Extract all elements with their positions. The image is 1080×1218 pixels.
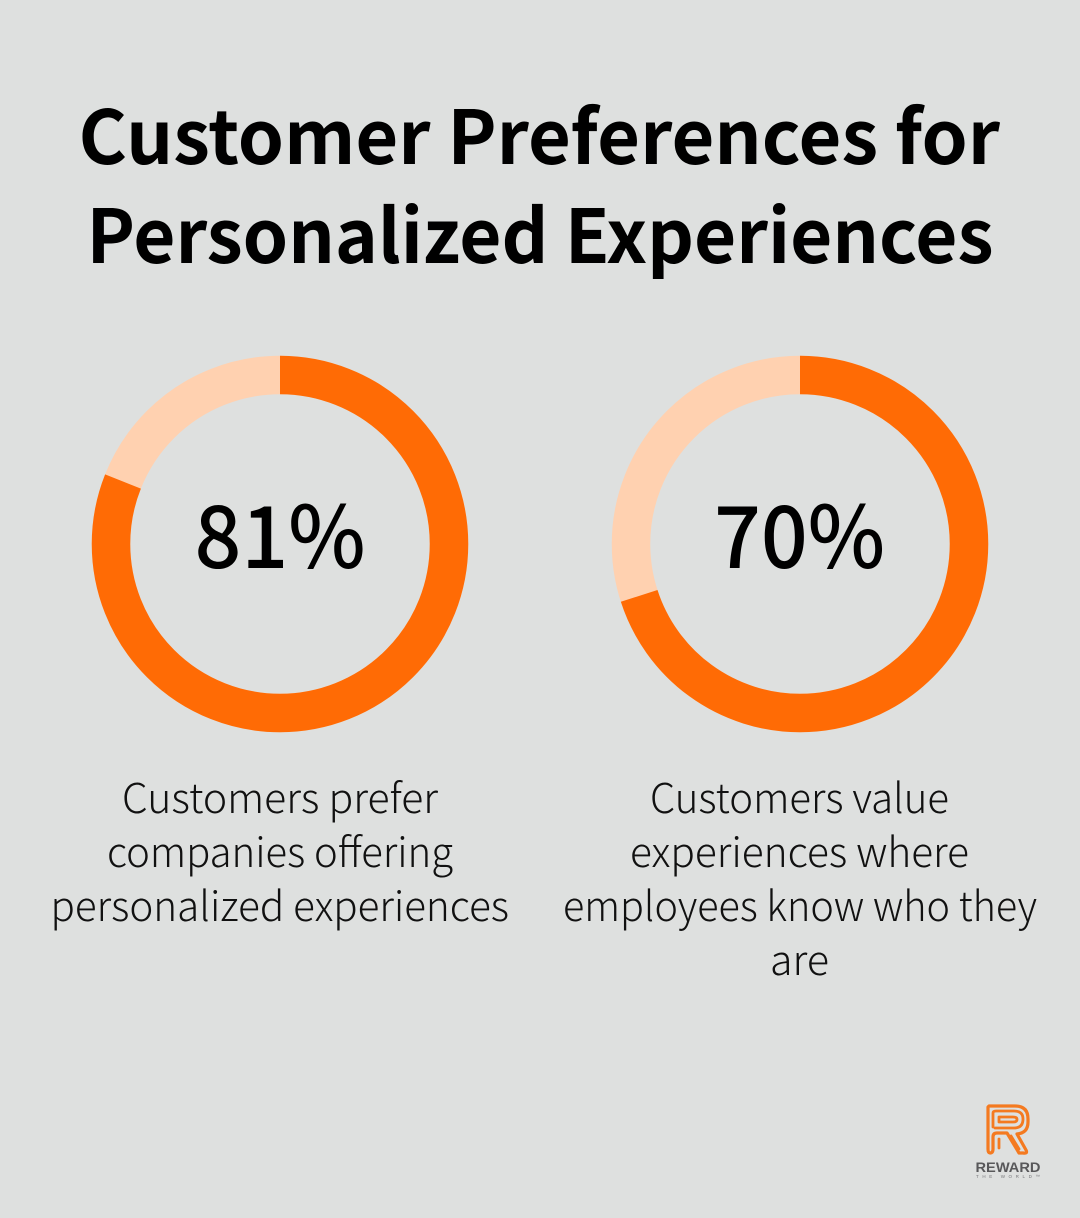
title: Personalized Experiences — [86, 178, 994, 285]
text block: 81% caption: Customers prefer — [122, 765, 438, 825]
icon: R mark — [988, 1106, 1028, 1153]
text block: 70% caption: are — [770, 927, 829, 987]
logo: Reward the World — [976, 1106, 1040, 1179]
panel: 81% donut chart — [111, 375, 449, 713]
text block: 70% caption: employees know who they — [563, 873, 1037, 933]
logo tagline: THE WORLD™ — [976, 1174, 1040, 1179]
panel: 70% donut chart — [631, 375, 969, 713]
text block: 70% caption: Customers value — [650, 765, 949, 825]
title — [78, 79, 1001, 285]
title: Customer Preferences for — [78, 79, 1001, 186]
text block: 70% caption — [563, 765, 1037, 987]
text block: 81% caption: personalized experiences — [50, 873, 509, 933]
panel: 81% donut chart: 81% — [194, 468, 366, 593]
logo wordmark: REWARD — [976, 1159, 1040, 1175]
panel: 70% donut chart: 70% — [714, 468, 885, 593]
text block: 81% caption — [50, 765, 509, 933]
text block: 70% caption: experiences where — [630, 819, 969, 879]
text block: 81% caption: companies offering — [107, 819, 453, 879]
